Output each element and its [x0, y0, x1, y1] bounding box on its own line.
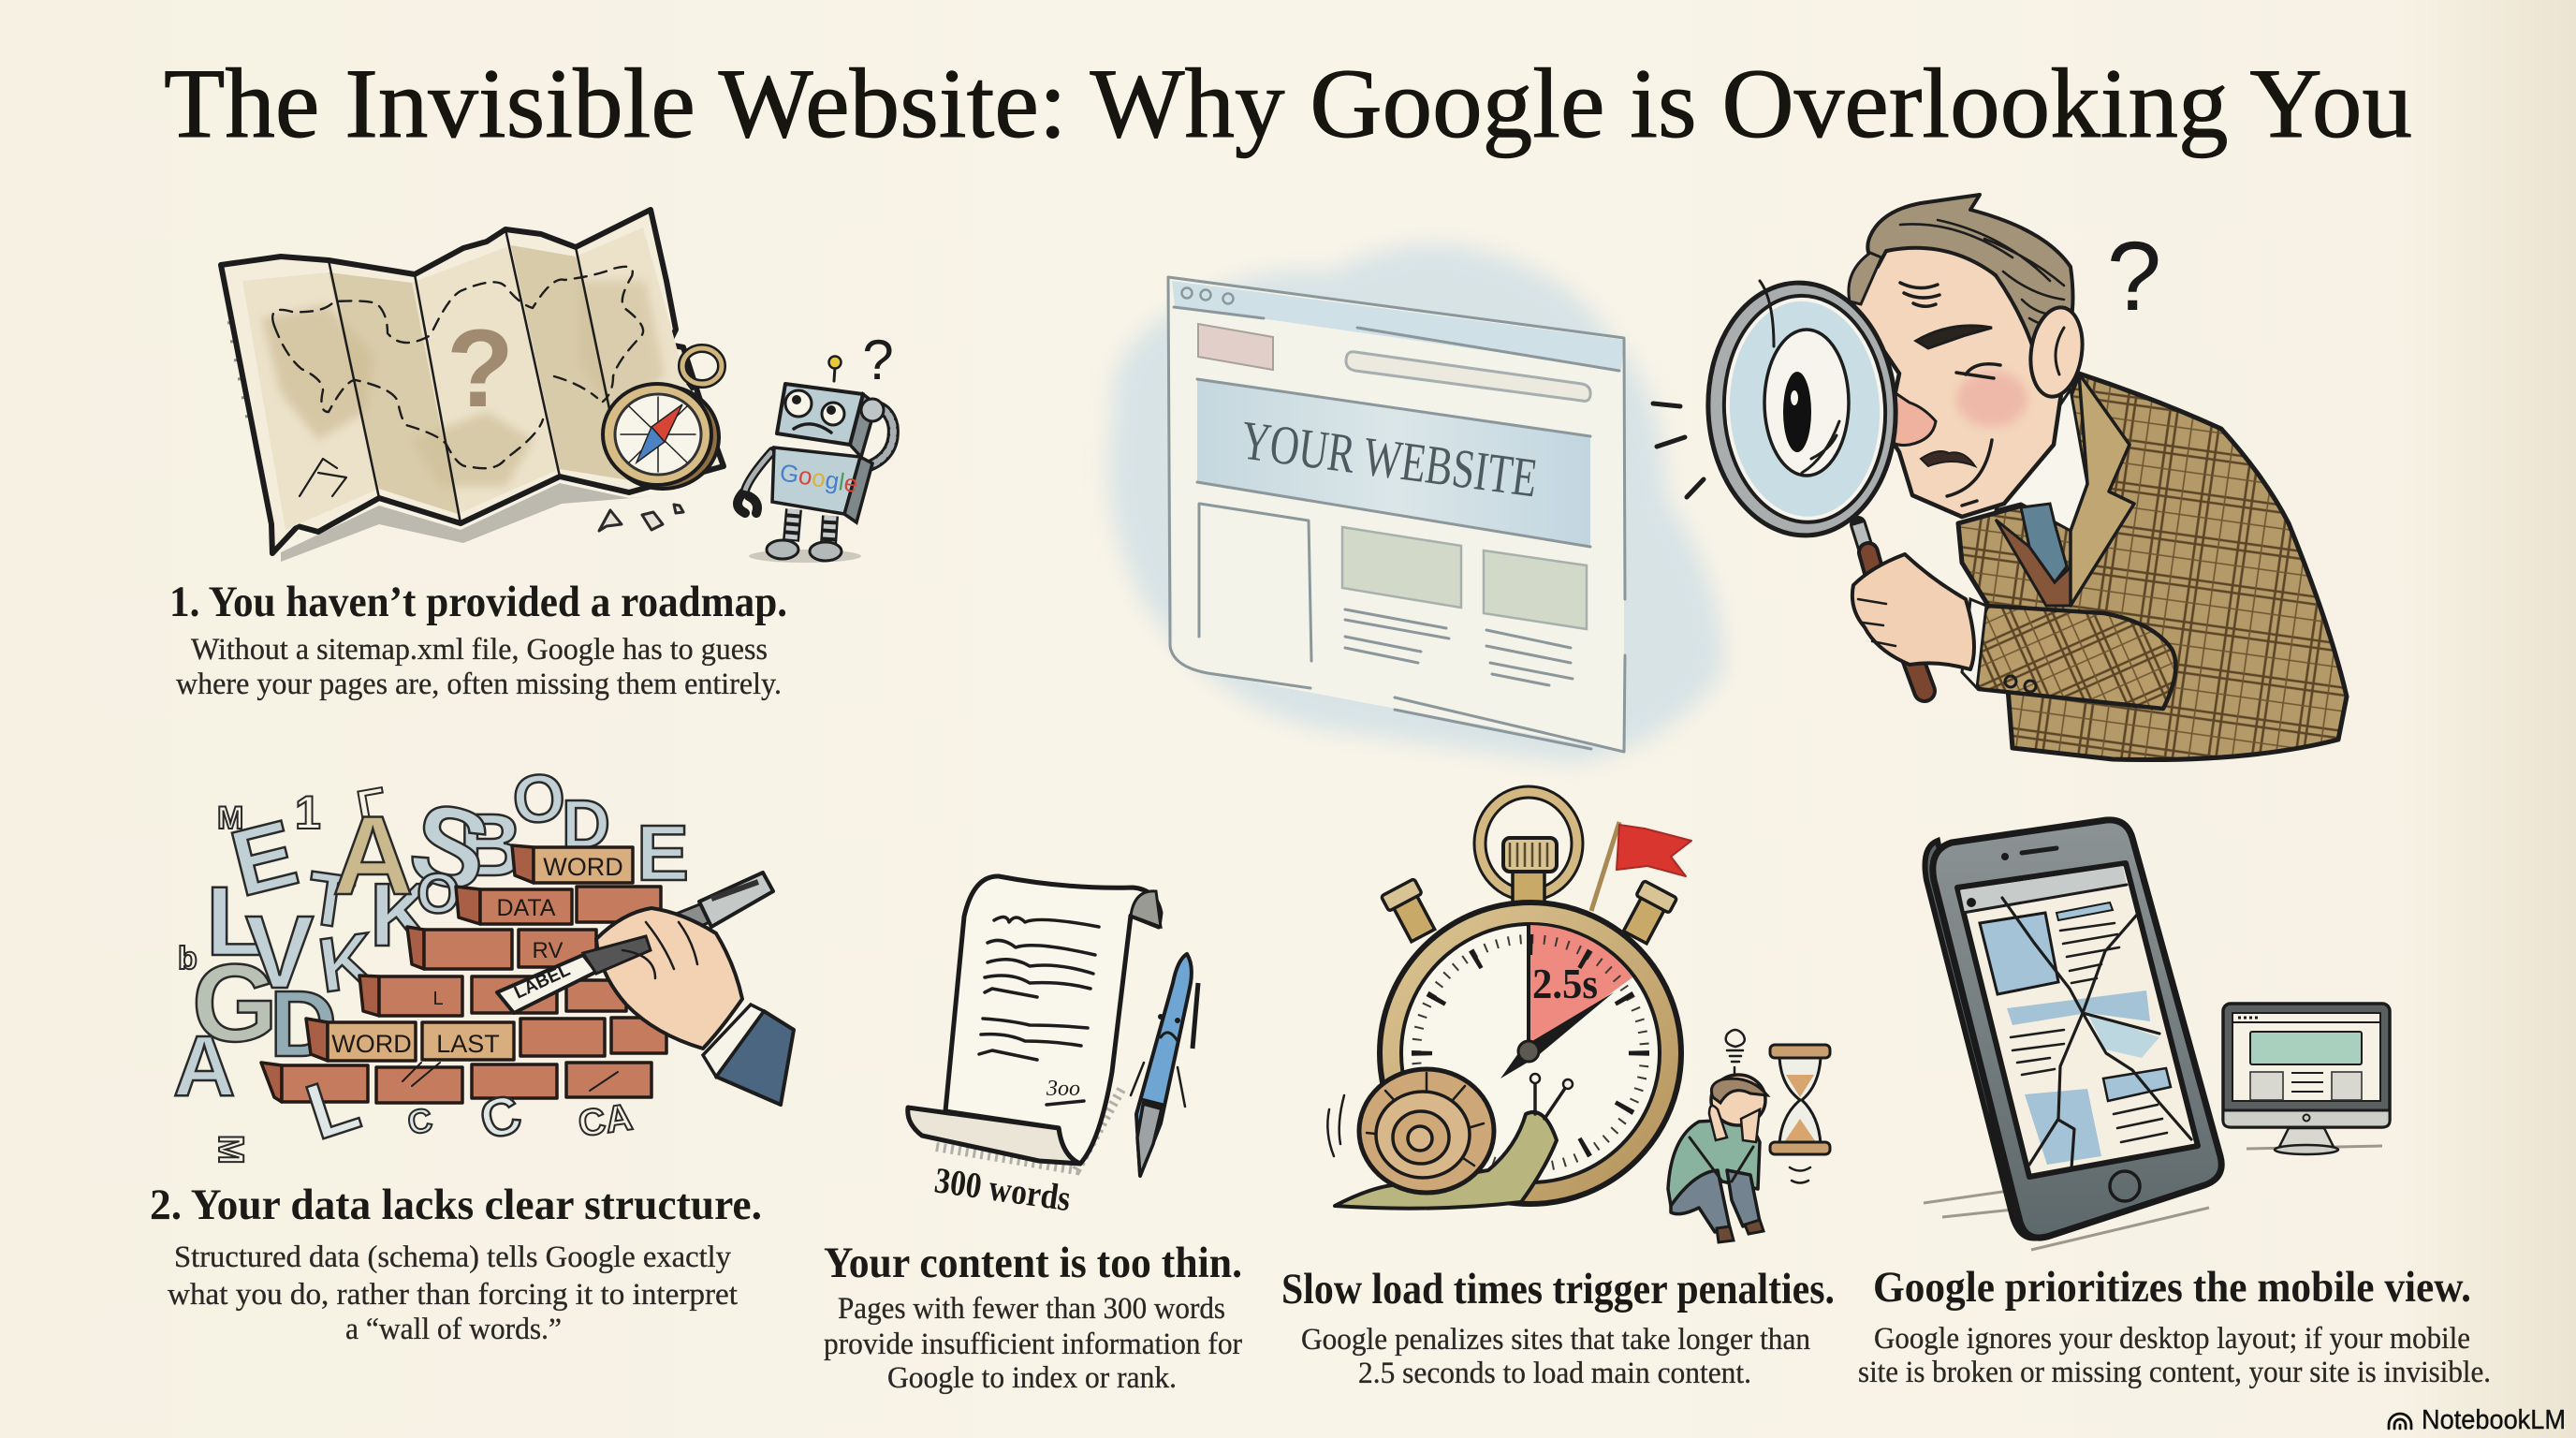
- illustration: brick wall: L: [432, 989, 444, 1009]
- illustration: cracked phone: [1924, 820, 2221, 1250]
- illustration: scattered letters: B: [459, 796, 523, 895]
- logo: NotebookLM: NotebookLM: [2422, 1405, 2566, 1435]
- illustration: scattered letters: G: [192, 942, 278, 1065]
- panel: hero website and inspector: [1108, 195, 2347, 763]
- illustration: scattered letters: E: [637, 809, 689, 897]
- illustration: scattered letters: L: [206, 867, 266, 976]
- illustration: brick wall: [261, 845, 666, 1103]
- text: mobile body: site is broken or missing content, your site is invisible.: [1858, 1356, 2491, 1389]
- text: structure body: [168, 1240, 738, 1346]
- illustration: scattered letters: D: [270, 972, 337, 1077]
- illustration: scattered letters: K: [314, 917, 380, 1009]
- illustration: scattered letters: K: [370, 865, 434, 965]
- head: [1850, 246, 2063, 517]
- illustration: stopwatch: 2.5s: [1532, 960, 1598, 1007]
- text: thin content body: Google to index or rank.: [887, 1361, 1177, 1395]
- illustration: sad pen: [1131, 954, 1198, 1176]
- question mark: ?: [2107, 222, 2161, 331]
- illustration: lower scattered letters: C: [474, 1082, 528, 1152]
- illustration: man with magnifying glass: [1702, 195, 2347, 760]
- illustration: scattered letters: [173, 759, 689, 1114]
- illustration: stressed person: [1668, 1030, 1767, 1242]
- text: slow load body: [1301, 1323, 1810, 1390]
- illustration: faded website: [1108, 244, 1723, 763]
- handle: [1858, 524, 1867, 554]
- illustration: scattered letters: E: [221, 800, 307, 917]
- icon: map question mark: ?: [446, 307, 514, 431]
- text: roadmap body: Without a sitemap.xml file, Google has to guess: [191, 633, 768, 667]
- icon: shards: [599, 505, 683, 531]
- illustration: snail: [1327, 1069, 1573, 1209]
- hand: [1852, 554, 1974, 669]
- text: structure body: Structured data (schema) tells Google exactly: [174, 1240, 731, 1274]
- illustration: scroll: [908, 876, 1161, 1170]
- panel: 5 mobile: [1858, 820, 2491, 1389]
- illustration: brick wall: LAST: [436, 1030, 500, 1058]
- illustration: stopwatch: [1380, 792, 1681, 1204]
- illustration: speed lines: [1653, 404, 1704, 497]
- text: slow load body: Google penalizes sites that take longer than: [1301, 1323, 1810, 1357]
- icon: red flag: [1591, 822, 1691, 911]
- panel: 2 structure: [150, 759, 794, 1346]
- label: 300 words: 300 words: [932, 1160, 1073, 1219]
- panel: 1 roadmap: [169, 210, 894, 701]
- text: thin content body: provide insufficient information for: [824, 1328, 1242, 1361]
- hair: [1867, 195, 2072, 348]
- text: structure body: what you do, rather than forcing it to interpret: [168, 1278, 738, 1312]
- illustration: brick wall: DATA: [497, 895, 556, 921]
- jacket: [1958, 374, 2347, 760]
- illustration: scattered letters: D: [562, 787, 610, 862]
- shirt: [1996, 389, 2087, 531]
- text: mobile body: Google ignores your desktop layout; if your mobile: [1874, 1322, 2470, 1356]
- heading: structure: 2. Your data lacks clear structure.: [150, 1181, 762, 1229]
- illustration: brick wall: RV: [533, 938, 563, 963]
- illustration: brick wall: WORD: [331, 1030, 412, 1058]
- title: The Invisible Website: Why Google is Overlooking You: [164, 49, 2412, 158]
- illustration: scattered letters: V: [245, 895, 314, 1010]
- tie: [2021, 504, 2067, 582]
- panel: 3 thin content: [824, 876, 1242, 1395]
- illustration: scattered letters: O: [417, 862, 461, 925]
- illustration: scattered letters: A: [332, 793, 414, 918]
- illustration: scroll: 3oo: [1046, 1077, 1080, 1101]
- illustration: hand with marker: [497, 873, 794, 1105]
- illustration: hand with marker: LABEL: [511, 961, 574, 1004]
- icon: confused robot: Google: [778, 458, 860, 498]
- illustration: scattered letters: O: [509, 759, 568, 839]
- vest: [1996, 520, 2075, 606]
- illustration: brick wall: WORD: [543, 853, 623, 881]
- illustration: lower scattered letters: L: [297, 1058, 369, 1156]
- heading: roadmap: 1. You haven’t provided a roadmap.: [169, 578, 787, 626]
- magnifier: [1702, 278, 1902, 540]
- label: your website: YOUR WEBSITE: [1237, 408, 1541, 508]
- heading: thin content: Your content is too thin.: [824, 1239, 1242, 1287]
- illustration: scattered letters: 1: [295, 786, 321, 839]
- text: roadmap body: where your pages are, often missing them entirely.: [176, 668, 782, 701]
- icon: confused robot: ?: [862, 329, 894, 391]
- illustration: scattered letters: A: [173, 1019, 235, 1114]
- text: slow load body: 2.5 seconds to load main content.: [1358, 1357, 1751, 1390]
- text: mobile body: [1858, 1322, 2491, 1389]
- illustration: scattered letters: Γ: [353, 777, 390, 834]
- illustration: lower scattered letters: CA: [576, 1096, 635, 1145]
- text: thin content body: Pages with fewer than 300 words: [838, 1292, 1225, 1326]
- lapel: [2071, 374, 2134, 606]
- text: thin content body: [824, 1292, 1242, 1395]
- illustration: scattered letters: S: [399, 777, 502, 917]
- icon: compass: [603, 348, 722, 489]
- text: structure body: a “wall of words.”: [345, 1313, 562, 1346]
- icon: confused robot: [738, 329, 894, 563]
- icon: desktop monitor: [2223, 1004, 2390, 1154]
- sleeve: [1967, 606, 2175, 709]
- illustration: lower scattered letters: [211, 1058, 635, 1165]
- illustration: scattered letters: T: [302, 856, 359, 945]
- illustration: lower scattered letters: M: [211, 1135, 250, 1165]
- text: roadmap body: [176, 633, 782, 701]
- icon: hourglass: [1770, 1045, 1830, 1183]
- heading: mobile: Google prioritizes the mobile view.: [1873, 1263, 2471, 1312]
- illustration: scattered letters: M: [217, 800, 243, 836]
- illustration: scattered letters: b: [178, 941, 198, 976]
- ear: [2026, 304, 2087, 400]
- heading: slow load: Slow load times trigger penalties.: [1281, 1265, 1835, 1313]
- panel: 4 slow load: [1281, 792, 1835, 1390]
- illustration: lower scattered letters: C: [404, 1100, 435, 1142]
- illustration: folded map: [221, 210, 724, 562]
